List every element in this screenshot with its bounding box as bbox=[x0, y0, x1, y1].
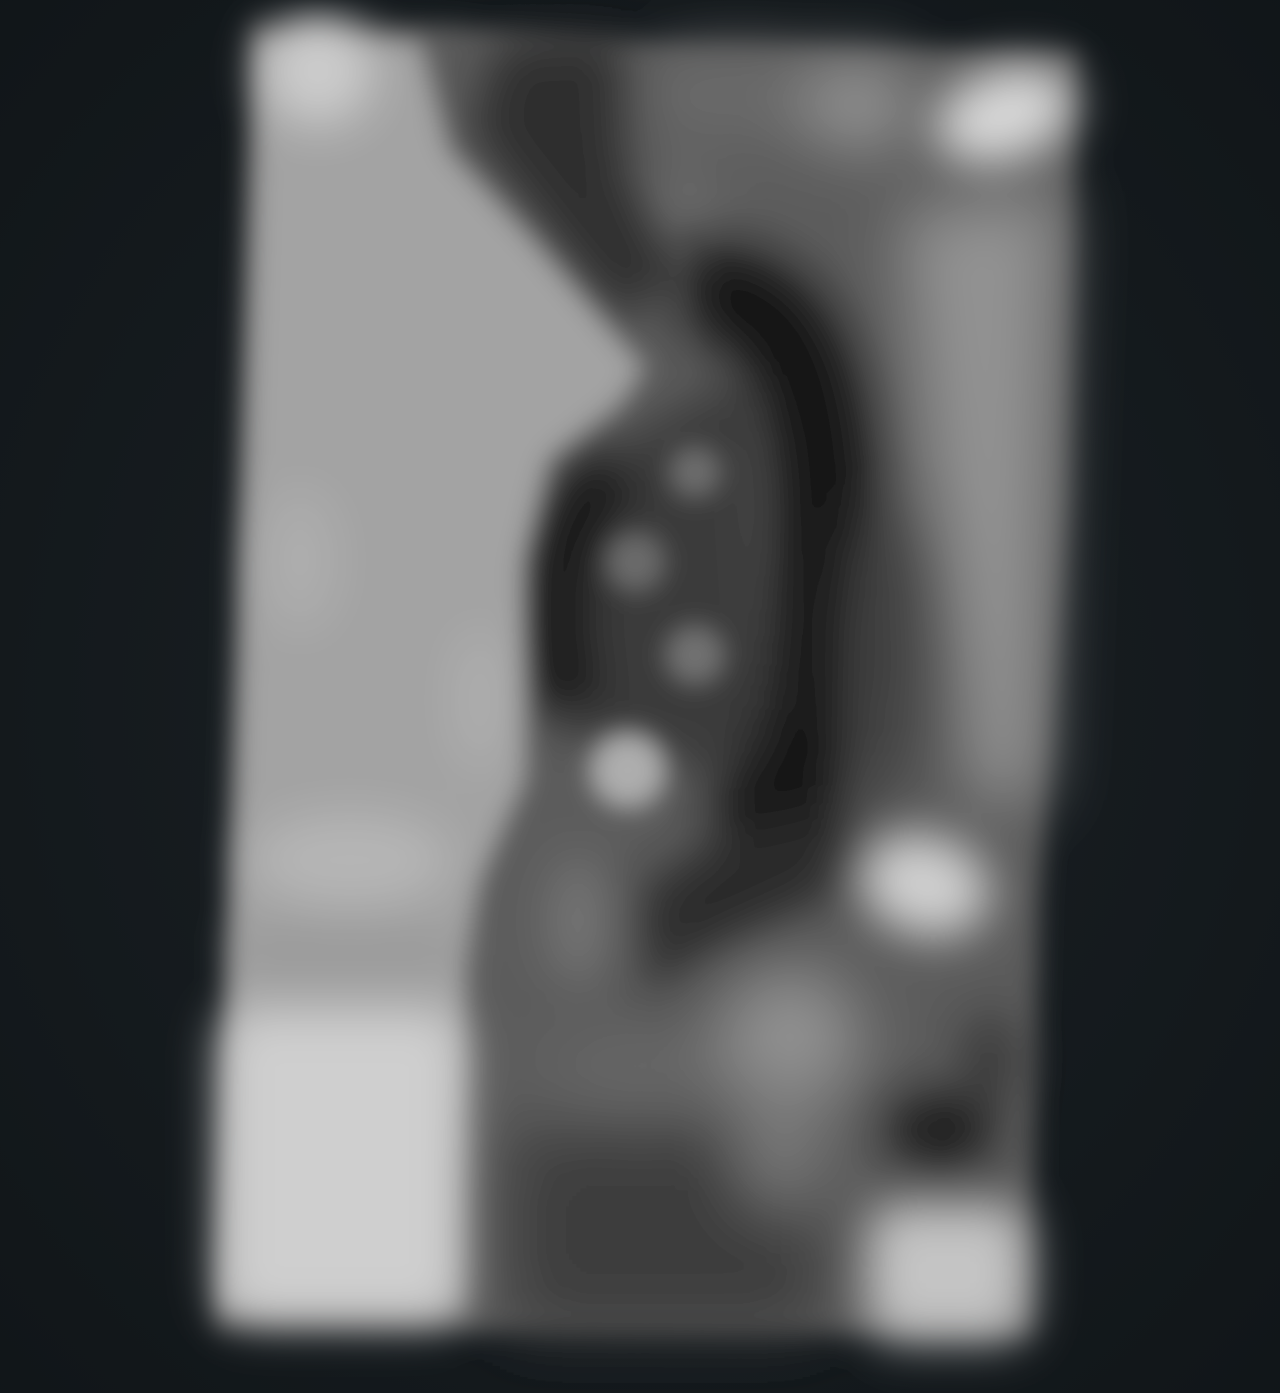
panel: dark upper middle region bbox=[470, 35, 680, 320]
panel: bright top left block bbox=[263, 15, 373, 125]
panel: lower right dark region bbox=[885, 1010, 1020, 1168]
callout: right middle highlight bbox=[847, 817, 1003, 953]
panel: left column bbox=[220, 40, 645, 1310]
icon: dot two bbox=[605, 532, 665, 592]
panel: upper right region bbox=[630, 50, 1060, 800]
panel: bright lower right block bbox=[868, 1205, 1028, 1340]
icon: dot four bbox=[590, 732, 666, 808]
panel: main card bbox=[215, 22, 1078, 1335]
panel: dark central ring bbox=[556, 294, 860, 1000]
icon: dot one bbox=[669, 446, 721, 498]
panel: bright lower left block bbox=[222, 1010, 462, 1320]
infographic content bbox=[215, 15, 1088, 1340]
panel: ring side shading bbox=[840, 510, 920, 810]
panel: lower middle region bbox=[510, 970, 860, 1330]
panel: lower middle column bbox=[548, 855, 608, 985]
icon: dot three bbox=[665, 625, 725, 685]
panel: lower left mid tone band bbox=[240, 490, 502, 965]
list markers: central dots bbox=[590, 446, 725, 808]
callout: top right highlight bbox=[922, 49, 1088, 181]
